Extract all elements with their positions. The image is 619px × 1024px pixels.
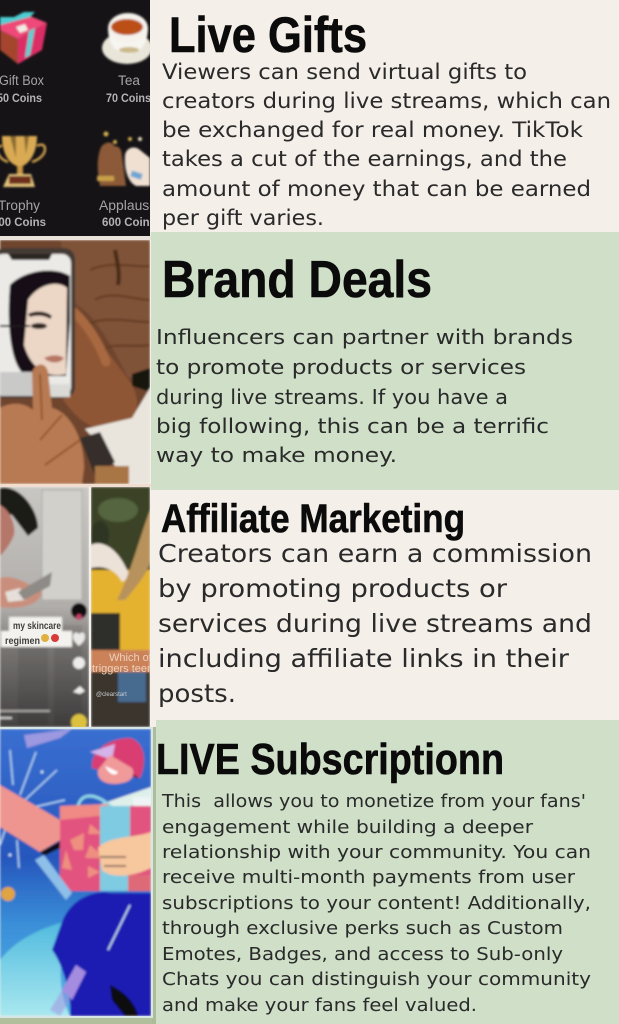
icon: gift box xyxy=(0,12,47,64)
text: brand deals description: to promote products or services xyxy=(156,355,526,379)
text: brand deals description: way to make money. xyxy=(156,443,397,467)
text: affiliate marketing description: including affiliate links in their xyxy=(158,644,570,673)
heading: live gifts: Live Gifts xyxy=(169,7,367,63)
text: live gifts description: takes a cut of the earnings, and the xyxy=(162,147,567,171)
text: live gifts description: per gift varies. xyxy=(162,206,324,230)
photo: phone with makeup try-on xyxy=(0,240,150,484)
text: affiliate marketing description: by promoting products or xyxy=(158,574,508,603)
text: live gifts description: creators during live streams, which can xyxy=(162,89,611,113)
panel: affiliate marketing xyxy=(0,484,619,730)
illustration: person receiving gift xyxy=(0,729,151,1016)
text: live subscription description: receive multi-month payments from user xyxy=(162,867,576,888)
text: live gifts description: amount of money that can be earned xyxy=(162,177,591,201)
icon: emoji xyxy=(41,634,59,642)
panel: live gifts xyxy=(0,0,619,236)
icon: tea cup xyxy=(102,13,152,64)
text: live gifts description: be exchanged for real money. TikTok xyxy=(162,118,584,142)
photo: virtual gift menu xyxy=(0,0,157,236)
text: brand deals description xyxy=(156,325,573,467)
text: affiliate marketing description: Creators can earn a commission xyxy=(158,539,592,568)
text: live subscription description: This allows you to monetize from your fans' xyxy=(161,791,586,812)
gift labels: 600 Coins xyxy=(102,217,156,229)
text: affiliate marketing description: services during live streams and xyxy=(158,609,592,638)
gift labels xyxy=(0,73,157,229)
panel: brand deals xyxy=(0,232,619,490)
gift labels: Applause xyxy=(99,198,157,213)
text: brand deals description: big following, this can be a terrific xyxy=(156,414,549,438)
gift labels: 70 Coins xyxy=(106,93,151,105)
text: live subscription description: subscriptions to your content! Additionally, xyxy=(162,893,591,914)
heading: affiliate marketing: Affiliate Marketing xyxy=(161,497,465,541)
text: live subscription description: Emotes, Badges, and access to Sub-only xyxy=(162,944,563,965)
text: live subscription description: through exclusive perks such as Custom xyxy=(162,918,563,939)
caption text on video xyxy=(92,653,150,697)
sticker text: my skincare regimen xyxy=(5,621,61,647)
sticker text: my skincare regimen: my skincare xyxy=(13,621,61,632)
caption text on video: @clearstart xyxy=(96,692,127,698)
text: brand deals description: Influencers can partner with brands xyxy=(156,325,573,349)
heading: live subscription: LIVE Subscriptionn xyxy=(156,735,504,784)
caption text on video: Which of t xyxy=(109,652,158,664)
icon: trophy xyxy=(0,136,45,187)
text: live gifts description xyxy=(162,60,611,230)
icon: applause hands xyxy=(97,132,150,186)
sticker text: my skincare regimen: regimen xyxy=(5,636,40,647)
gift labels: Tea xyxy=(118,73,140,88)
gift labels: Gift Box xyxy=(0,73,44,88)
text: brand deals description: during live streams. If you have a xyxy=(156,385,508,409)
text: live gifts description: Viewers can send virtual gifts to xyxy=(162,60,527,84)
text: live subscription description: engagement while building a deeper xyxy=(162,817,534,838)
panel: live subscription xyxy=(0,720,619,1024)
text: affiliate marketing description xyxy=(158,539,592,708)
text: live subscription description xyxy=(161,791,591,1016)
caption text on video: triggers teen a xyxy=(92,663,163,675)
text: live subscription description: and make your fans feel valued. xyxy=(162,995,477,1016)
heading: brand deals: Brand Deals xyxy=(162,251,432,309)
text: live subscription description: relationship with your community. You can xyxy=(162,842,591,863)
text: live subscription description: Chats you can distinguish your community xyxy=(162,969,591,990)
text: affiliate marketing description: posts. xyxy=(158,679,236,708)
photo: yellow shirt video xyxy=(91,487,150,727)
photo: skincare video xyxy=(0,487,89,730)
